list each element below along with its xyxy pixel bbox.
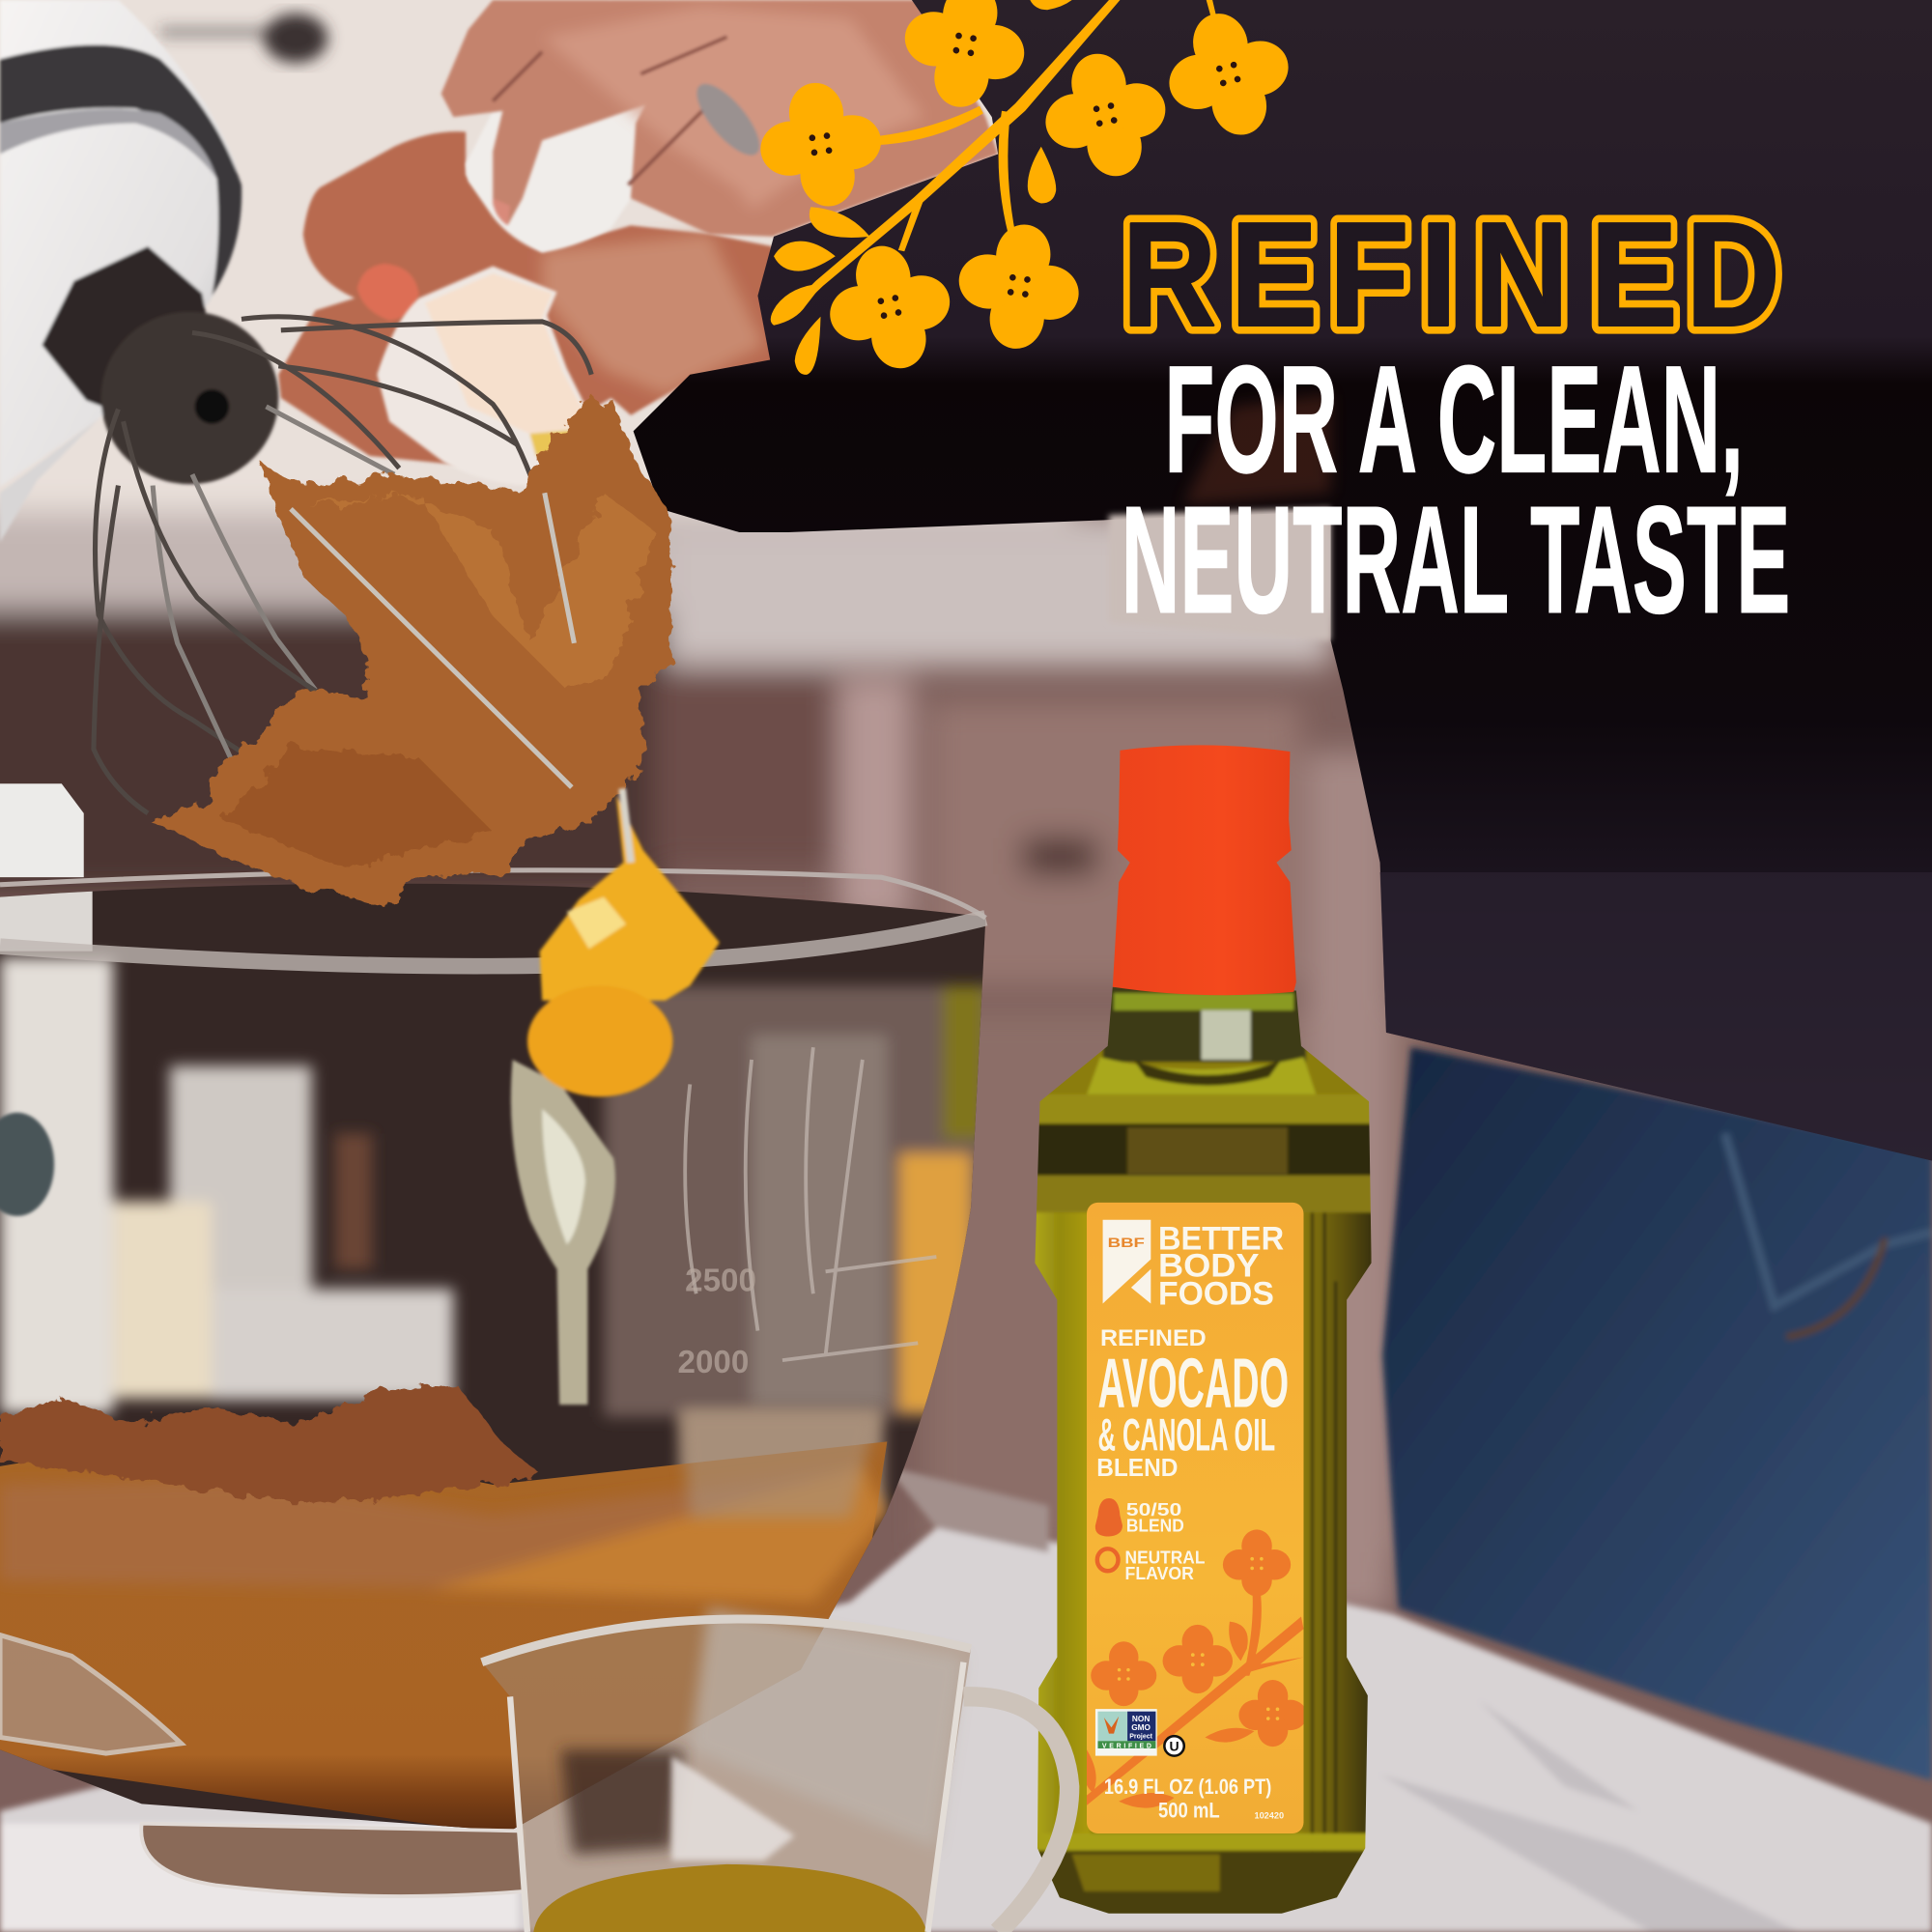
photo: mixer base <box>0 783 84 877</box>
bowl measurement marks <box>678 1264 756 1380</box>
badge: non-GMO <box>1095 1709 1157 1756</box>
net contents: 500 mL <box>1158 1798 1220 1822</box>
photo: sweater <box>634 0 1932 1161</box>
label benefits: 50/50 <box>1126 1499 1181 1520</box>
bottle glass <box>1036 987 1372 1914</box>
photo: stand mixer head <box>0 0 278 542</box>
label flowers and branch <box>1084 1529 1307 1808</box>
heading: REFINED: REFINED <box>1122 191 1780 357</box>
brand name: BETTER <box>1158 1220 1284 1257</box>
photo: measuring cup <box>482 1608 1069 1932</box>
product name: & CANOLA OIL <box>1097 1409 1275 1461</box>
lot code: 102420 <box>1254 1811 1284 1821</box>
logo letters: BBF <box>1108 1235 1146 1250</box>
heading: for a clean, neutral taste <box>1122 334 1790 645</box>
badge: non-GMO: NON <box>1132 1714 1150 1723</box>
product name: REFINED <box>1100 1325 1207 1351</box>
brand logo <box>1103 1220 1151 1303</box>
heading: REFINED: REFINED <box>1122 191 1780 357</box>
photo: egg yolk falling <box>511 788 720 1405</box>
photo: jeans <box>1382 1047 1932 1780</box>
brand name <box>1158 1220 1284 1313</box>
badge: non-GMO: Project <box>1129 1734 1153 1741</box>
bottle cap <box>1113 745 1296 995</box>
photo: hand with ring <box>441 0 998 237</box>
photo: hand holding egg <box>278 131 773 469</box>
net contents: 16.9 FL OZ (1.06 PT) <box>1104 1775 1271 1799</box>
photo: lower egg shell <box>377 267 596 486</box>
bowl measurement marks: 2000 <box>678 1345 749 1380</box>
photo: whisk wires in dough <box>291 493 574 787</box>
bowl base <box>141 1824 524 1896</box>
label benefits <box>1125 1499 1205 1583</box>
photo: dough on whisk <box>148 398 672 907</box>
brand name: FOODS <box>1158 1276 1274 1313</box>
label benefits: FLAVOR <box>1125 1563 1194 1583</box>
label benefits: BLEND <box>1126 1515 1184 1535</box>
brand name: BODY <box>1158 1247 1260 1284</box>
bowl measurement marks: 2500 <box>685 1264 756 1299</box>
product name: AVOCADO <box>1097 1345 1289 1423</box>
product name <box>1096 1325 1289 1482</box>
panel: bottle label <box>1084 1203 1307 1833</box>
label benefits: NEUTRAL <box>1125 1548 1205 1568</box>
icon: neutral ring <box>1097 1548 1119 1571</box>
badge: kosher <box>1164 1736 1184 1756</box>
decoration: yellow flower branch <box>753 0 1303 381</box>
badge: non-GMO: GMO <box>1131 1722 1151 1732</box>
net contents <box>1104 1775 1271 1822</box>
photo: whisk wires <box>94 317 591 813</box>
badge: kosher: U <box>1169 1738 1179 1753</box>
photo: upper egg shell <box>466 0 645 252</box>
product: oil bottle <box>1023 745 1392 1924</box>
photo: glass mixing bowl <box>0 863 998 1896</box>
bowl handle <box>0 1635 182 1753</box>
photo: marble table <box>0 1466 1932 1932</box>
product name: BLEND <box>1096 1455 1178 1482</box>
icon: avocado <box>1095 1498 1122 1537</box>
badge: non-GMO: VERIFIED <box>1102 1743 1151 1749</box>
